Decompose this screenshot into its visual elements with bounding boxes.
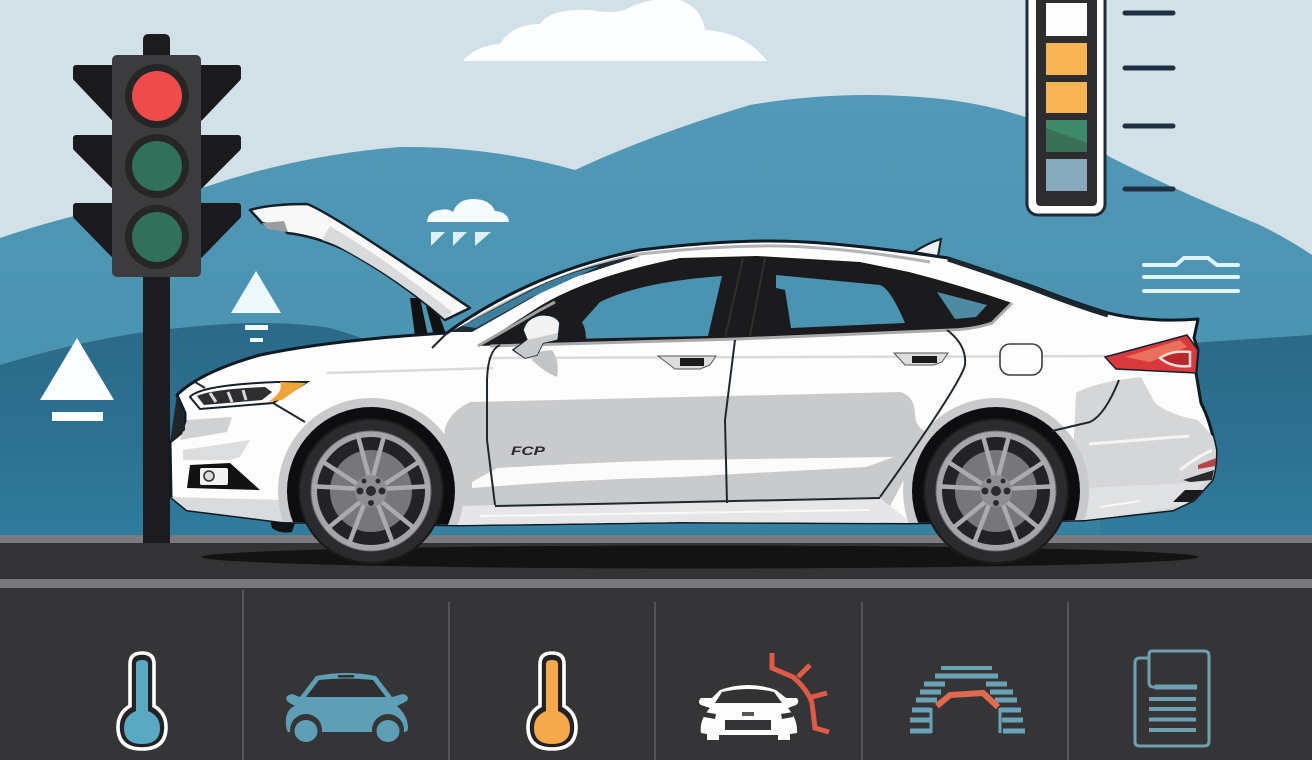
car body	[170, 241, 1216, 525]
red lamp	[125, 64, 189, 128]
windshield glass	[462, 266, 600, 328]
housing	[112, 55, 201, 277]
gauge cell: blue	[1046, 159, 1087, 191]
gauge cell: orange	[1046, 43, 1087, 75]
rain cloud icon	[427, 199, 509, 246]
warning triangle: large	[40, 338, 114, 421]
cloud: top	[463, 0, 767, 61]
badge text: FCP	[511, 444, 546, 458]
side window frame	[478, 256, 1012, 346]
gauge cell: white	[1046, 3, 1087, 36]
spoiler fin	[914, 239, 941, 256]
front window trim	[478, 302, 555, 346]
pole	[143, 270, 170, 543]
rear roof band	[948, 259, 1108, 315]
top cap	[143, 34, 170, 60]
windshield	[450, 256, 640, 332]
rear wheel	[923, 418, 1069, 564]
door seams	[195, 330, 1119, 506]
rear lower bumper	[1084, 482, 1205, 522]
gauge cell: green	[1046, 120, 1087, 152]
front hill: left	[0, 323, 420, 545]
hood struts	[410, 298, 446, 336]
car shadow	[202, 546, 1198, 568]
car	[170, 204, 1225, 584]
green lamp	[125, 134, 189, 198]
front wheel	[298, 418, 444, 564]
pillar highlight	[725, 258, 765, 338]
rear quarter glass	[937, 292, 987, 319]
road	[0, 535, 1312, 588]
gauge tick marks	[1125, 13, 1173, 189]
door shade	[440, 392, 928, 525]
rear quarter shade	[1070, 377, 1225, 525]
icon: document	[1135, 651, 1209, 746]
fender arch: rear	[903, 398, 1089, 523]
grille edge	[170, 395, 185, 442]
front door handle	[658, 356, 716, 369]
wave lines icon	[1144, 258, 1238, 291]
panel dividers	[243, 590, 1068, 760]
body shading	[171, 354, 1216, 525]
fuel door	[1000, 344, 1042, 375]
headlight	[190, 382, 307, 409]
fender arch: front	[278, 398, 462, 525]
front seat	[566, 318, 586, 340]
bottom panel	[0, 588, 1312, 760]
fog lamp	[187, 463, 260, 490]
warning triangle: small	[231, 271, 281, 342]
icon: hot thermometer	[528, 653, 576, 749]
wheel well: front	[287, 407, 455, 525]
side mirror	[513, 315, 560, 377]
back hills	[0, 95, 1312, 545]
icon: blue car	[286, 673, 408, 746]
open hood	[250, 204, 470, 320]
icon: front car with gauge	[699, 653, 829, 740]
tail light	[1105, 335, 1198, 373]
rear reflector	[1183, 470, 1214, 482]
door highlight band	[472, 457, 894, 488]
front bumper shade	[180, 417, 232, 440]
wheel well: rear	[912, 407, 1080, 523]
roof stripe	[470, 246, 930, 322]
front hill: right	[1100, 335, 1312, 545]
visors	[76, 68, 238, 255]
red gauge	[772, 653, 829, 732]
white car	[699, 685, 798, 740]
icon: tyre arch	[910, 668, 1025, 733]
rear door handle	[894, 353, 948, 365]
rear side glass	[776, 275, 905, 328]
side window trim	[490, 303, 1012, 346]
icon: cold thermometer	[118, 653, 166, 749]
green lamp	[125, 205, 189, 269]
traffic light	[76, 34, 238, 543]
level gauge	[1027, 0, 1105, 215]
front side glass	[567, 276, 722, 339]
sky background	[0, 0, 1312, 545]
sill	[455, 498, 915, 525]
bumper underside	[270, 520, 296, 532]
creases	[327, 356, 1115, 373]
gauge cell: orange	[1046, 82, 1087, 113]
